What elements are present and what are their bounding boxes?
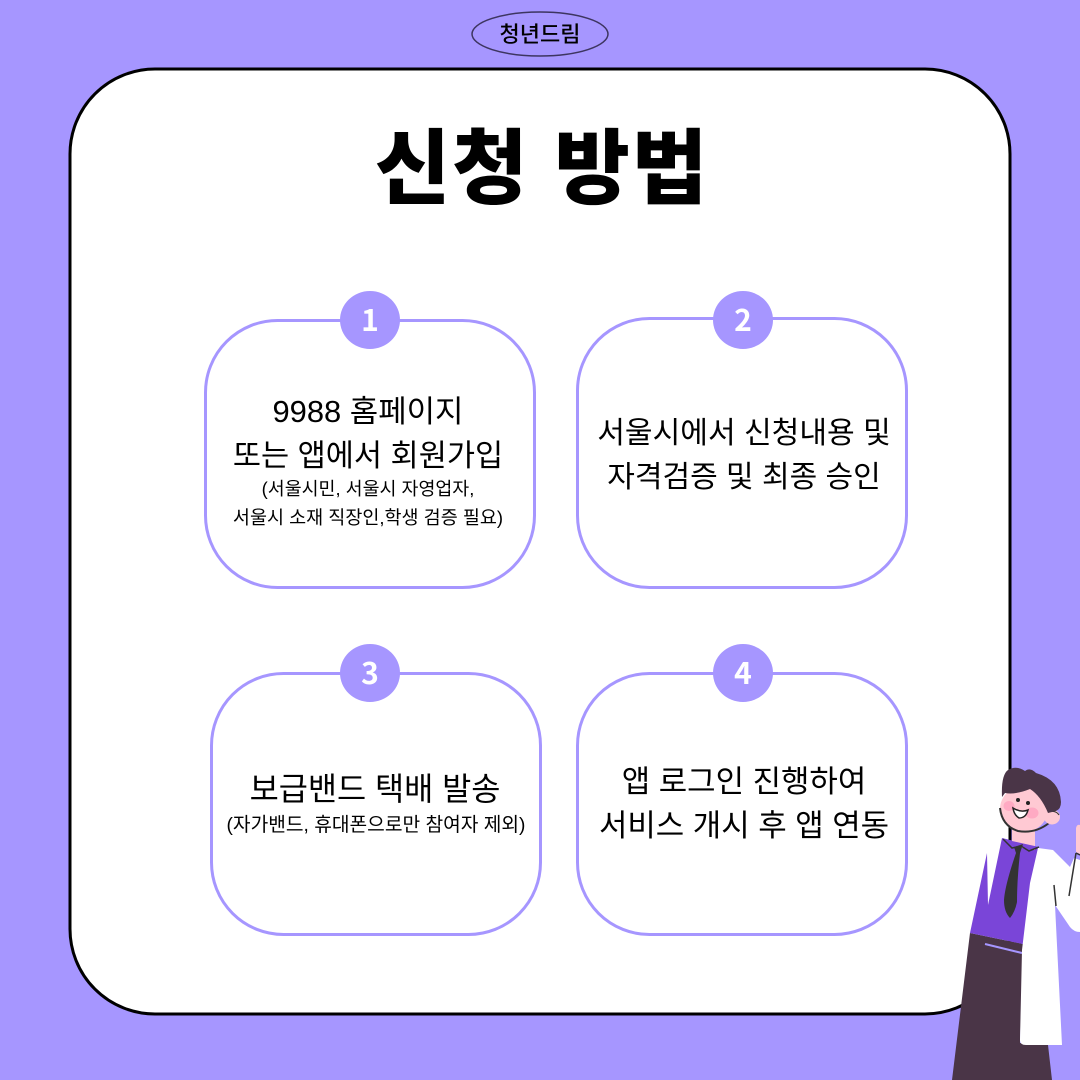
- step 2 text: [597, 417, 891, 494]
- step 2 text: 자격검증 및 최종 승인: [607, 461, 881, 494]
- panel: step 3: [212, 644, 540, 934]
- step 2 text: 서울시에서 신청내용 및: [597, 417, 891, 450]
- step 1 text: 9988 홈페이지: [273, 394, 463, 429]
- brand badge: 청년드림: [472, 12, 608, 56]
- step 1 number badge: [340, 291, 400, 349]
- panel: step 2: [578, 291, 906, 588]
- panel: step 1: [206, 291, 534, 588]
- step 1 text: 서울시 소재 직장인,학생 검증 필요): [233, 507, 503, 528]
- main white panel: [70, 69, 1010, 1014]
- step 4 text: 서비스 개시 후 앱 연동: [599, 808, 889, 843]
- step 3 text: (자가밴드, 휴대폰으로만 참여자 제외): [227, 814, 525, 836]
- step 4 number badge: [713, 644, 773, 702]
- step 4 number badge: 4: [734, 649, 752, 693]
- panel: step 4: [578, 644, 906, 934]
- step 1 text: 또는 앱에서 회원가입: [233, 439, 503, 473]
- step 2 number badge: 2: [734, 296, 752, 340]
- step 1 text: [233, 394, 503, 528]
- step 1 number badge: 1: [361, 296, 379, 340]
- step 3 text: [227, 771, 525, 836]
- step 3 number badge: [340, 644, 400, 702]
- brand badge: 청년드림: 청년드림: [500, 22, 580, 47]
- step 4 text: [599, 764, 889, 843]
- title: 신청 방법: [375, 124, 709, 215]
- step 3 text: 보급밴드 택배 발송: [250, 771, 500, 807]
- step 4 text: 앱 로그인 진행하여: [622, 764, 866, 799]
- step 3 number badge: 3: [361, 649, 379, 693]
- step 2 number badge: [713, 291, 773, 349]
- step 1 text: (서울시민, 서울시 자영업자,: [262, 478, 474, 499]
- icon: doctor character: [952, 768, 1080, 1080]
